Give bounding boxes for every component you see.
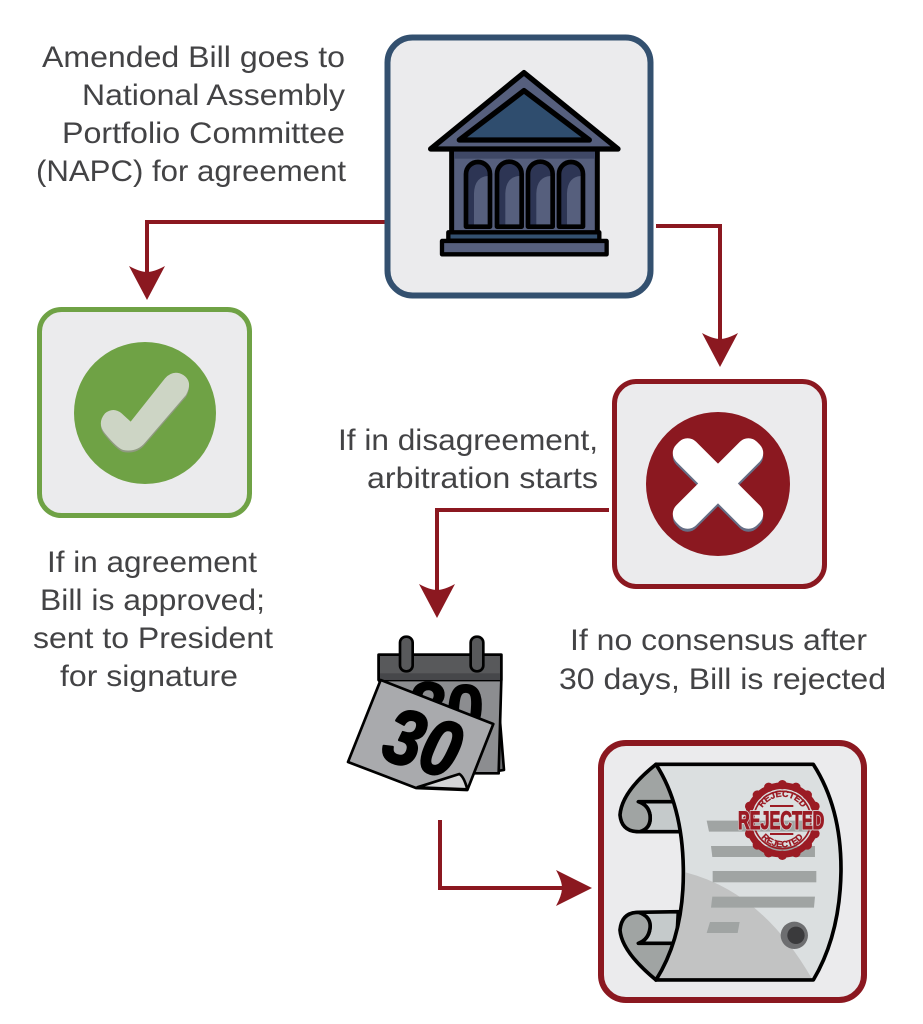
text: agreement outcome: [33, 546, 274, 693]
heading text: amended bill: (NAPC) for agreement: [36, 155, 347, 188]
heading text: amended bill: National Assembly: [82, 79, 345, 112]
icon: rejected scroll: [618, 762, 843, 982]
icon: red cross circle: [646, 412, 790, 556]
arrow: to disagreement: [656, 226, 738, 367]
text: no consensus: If no consensus after: [570, 624, 867, 657]
panel: parliament building: [388, 38, 650, 296]
stamp: rejected: REJECTED: [761, 833, 802, 848]
arrow: to calendar: [419, 510, 609, 618]
icon: calendar 30 days: 30: [375, 690, 471, 795]
heading text: amended bill: Amended Bill goes to: [42, 41, 345, 74]
icon: calendar 30 days: 30: [407, 669, 486, 748]
text: agreement outcome: for signature: [60, 660, 238, 693]
icon: parliament building: [431, 73, 618, 254]
text: no consensus: [559, 624, 886, 696]
panel: disagreement cross: [614, 382, 824, 586]
stamp: rejected: [738, 780, 824, 860]
stamp: rejected: REJECTED: [738, 808, 824, 835]
text: no consensus: 30 days, Bill is rejected: [559, 663, 886, 696]
stamp: rejected: REJECTED: [758, 790, 806, 808]
text: arbitration: [338, 424, 598, 495]
stamp: rejected: REJECTED: [738, 808, 824, 835]
icon: green check circle: [74, 342, 216, 484]
heading text: amended bill: [36, 41, 347, 188]
text: arbitration: If in disagreement,: [338, 424, 598, 457]
panel: rejected bill: [598, 740, 867, 1003]
text: agreement outcome: Bill is approved;: [40, 584, 265, 617]
panel: approved check: [40, 310, 250, 516]
arrow: to rejected bill: [440, 820, 592, 906]
arrow: to approval: [129, 222, 387, 300]
icon: calendar 30 days: [348, 637, 504, 795]
text: agreement outcome: If in agreement: [47, 546, 258, 579]
text: agreement outcome: sent to President: [33, 622, 274, 655]
heading text: amended bill: Portfolio Committee: [62, 117, 345, 150]
text: arbitration: arbitration starts: [367, 462, 598, 495]
